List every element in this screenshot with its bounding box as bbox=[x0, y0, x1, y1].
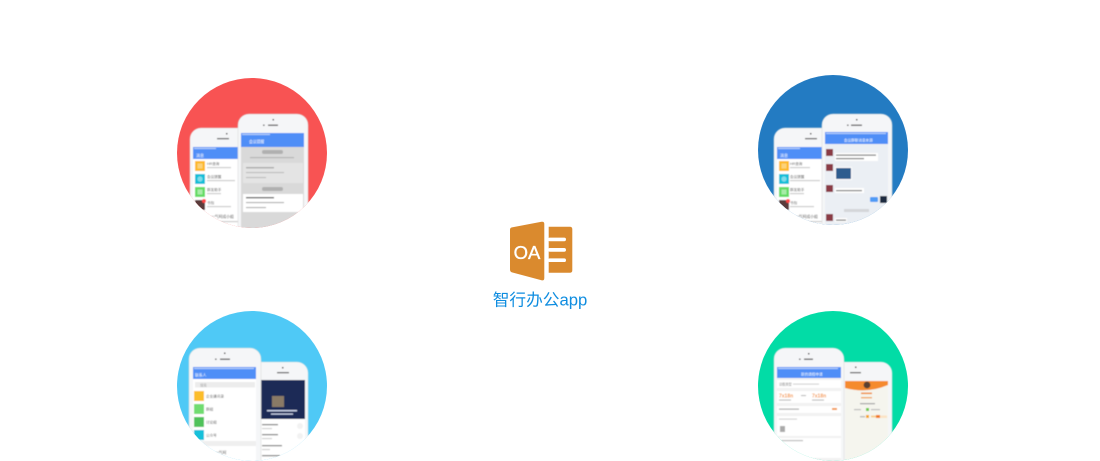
center logo: OA door icon bbox=[510, 222, 572, 280]
back phone: message list: 书包 bbox=[790, 200, 798, 205]
back phone: profile bbox=[844, 360, 894, 460]
back phone: message list: 消息 bbox=[780, 152, 788, 158]
back phone: message list bbox=[773, 127, 822, 224]
front phone: contacts list: 讨论组 bbox=[206, 420, 217, 424]
front phone: leave request form: 请假类型 bbox=[779, 382, 793, 386]
center logo: OA door icon: OA bbox=[514, 242, 541, 263]
front phone: contacts list: 群组 bbox=[206, 406, 214, 412]
front phone: group chat: 会议群聊消息来源 bbox=[844, 138, 873, 142]
front phone: contacts list: 公众号 bbox=[206, 432, 217, 438]
front phone: leave request form: 新的请假申请 bbox=[801, 372, 823, 376]
back phone: message list: 消息 bbox=[196, 152, 204, 158]
panel: green circle with attendance phones bbox=[758, 311, 908, 461]
panel: red circle with message and meeting phones bbox=[177, 78, 327, 228]
front phone: leave request form: 7x18n bbox=[779, 394, 793, 400]
back phone: message list: 群发助手 bbox=[790, 187, 805, 192]
front phone: contacts list bbox=[189, 348, 261, 461]
back phone: message list bbox=[189, 127, 238, 226]
back phone: message list: 一气呵成小组 bbox=[211, 214, 234, 219]
title: app name: 智行办公app bbox=[493, 290, 587, 310]
panel: blue circle with chat phones bbox=[758, 75, 908, 225]
back phone: message list: 群发助手 bbox=[207, 187, 222, 192]
front phone: leave request form: 7x18n bbox=[812, 394, 826, 400]
front phone: leave request form bbox=[774, 348, 844, 461]
front phone: meeting reminder: 会议提醒 bbox=[249, 139, 264, 144]
back phone: message list: 一气呵成小组 bbox=[795, 214, 818, 219]
front phone: contacts list: 联系人 bbox=[195, 372, 207, 378]
back phone: message list: 会议提醒 bbox=[207, 174, 222, 179]
front phone: contacts list: 企业通讯录 bbox=[206, 394, 224, 398]
front phone: contacts list: 一气呵 bbox=[215, 450, 227, 455]
front phone: contacts list: 搜索 bbox=[200, 382, 207, 388]
back phone: message list: 会议提醒 bbox=[790, 174, 805, 179]
back phone: message list: 书包 bbox=[207, 200, 215, 205]
back phone: group page bbox=[260, 361, 309, 460]
back phone: message list: HR查询 bbox=[207, 161, 220, 166]
panel: sky-blue circle with contacts phones bbox=[177, 311, 327, 461]
back phone: message list: HR查询 bbox=[790, 161, 803, 166]
